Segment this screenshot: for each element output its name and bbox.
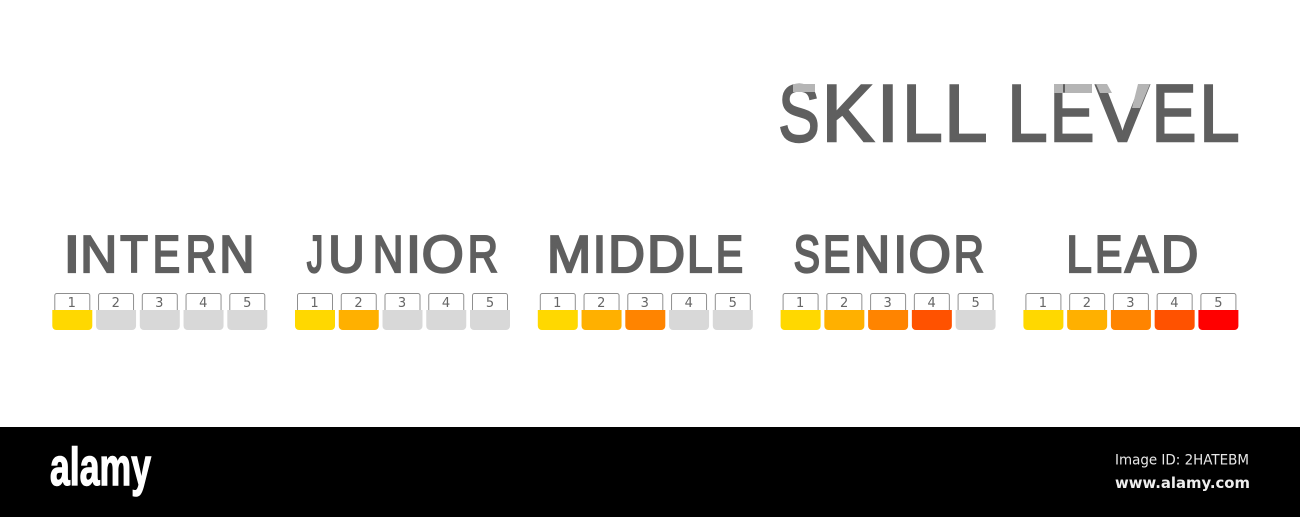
- heading: intern: T: [120, 226, 148, 284]
- heading: lead: E: [1095, 226, 1122, 284]
- heading: intern: R: [186, 226, 216, 284]
- scale: intern: [52, 294, 267, 330]
- scale: senior: 1: [796, 296, 804, 311]
- footer band: [0, 427, 1300, 517]
- scale: intern: 4: [199, 296, 207, 311]
- scale: middle: 3: [641, 296, 649, 311]
- scale: lead: 2: [1083, 296, 1091, 311]
- scale: senior: 3: [883, 296, 892, 311]
- title: E: [1050, 69, 1094, 159]
- title: L: [1199, 69, 1240, 159]
- scale: middle: 5: [729, 296, 737, 311]
- scale: intern: 3: [155, 296, 163, 311]
- website: www.alamy.com: [1115, 474, 1250, 492]
- scale: junior: [295, 294, 510, 330]
- scale: junior: 4: [442, 296, 450, 311]
- heading: middle: D: [608, 226, 645, 284]
- heading: intern: N: [219, 226, 254, 284]
- title: K: [822, 69, 874, 159]
- heading: senior: R: [954, 226, 984, 284]
- heading: lead: L: [1066, 226, 1092, 284]
- scale: junior: 2: [354, 296, 363, 311]
- heading: senior: I: [894, 226, 907, 284]
- scale: junior: 1: [310, 296, 319, 311]
- scale: middle: 1: [553, 296, 561, 311]
- heading: intern: N: [80, 226, 117, 284]
- panel: middle: [538, 226, 753, 330]
- image id: Image ID: 2HATEBM: [1115, 452, 1249, 468]
- heading: junior: O: [422, 226, 464, 284]
- scale: junior: 5: [486, 296, 494, 311]
- heading: middle: D: [647, 226, 685, 284]
- scale: senior: 4: [927, 296, 936, 311]
- heading: senior: S: [794, 226, 820, 284]
- heading: middle: I: [593, 226, 606, 284]
- scale: senior: 5: [971, 296, 980, 311]
- heading: lead: A: [1125, 226, 1158, 284]
- title: L: [902, 69, 943, 159]
- heading: junior: R: [468, 226, 498, 284]
- scale: intern: 5: [243, 296, 251, 311]
- heading: junior: J: [307, 226, 323, 284]
- scale: intern: 2: [112, 296, 120, 311]
- heading: senior: N: [854, 226, 890, 284]
- heading: lead: D: [1161, 226, 1198, 284]
- heading: junior: N: [373, 226, 403, 284]
- heading: middle: L: [687, 226, 713, 284]
- scale: middle: 2: [597, 296, 605, 311]
- heading: intern: E: [153, 226, 180, 284]
- heading: intern: I: [63, 226, 80, 284]
- scale: lead: 5: [1214, 296, 1223, 311]
- logo: alamy: alamy: [50, 438, 151, 497]
- title: E: [1152, 69, 1196, 159]
- scale: intern: 1: [68, 296, 76, 311]
- scale: junior: 3: [398, 296, 406, 311]
- scale: middle: [538, 294, 753, 330]
- heading: junior: I: [406, 226, 421, 284]
- title: S: [778, 69, 820, 159]
- panel: senior: [781, 226, 996, 330]
- heading: senior: O: [908, 226, 951, 284]
- panel: junior: [295, 226, 510, 330]
- scale: lead: [1023, 294, 1238, 330]
- heading: middle: E: [716, 226, 743, 284]
- title: V: [1096, 69, 1149, 159]
- scale: middle: 4: [685, 296, 693, 311]
- panel: lead: [1023, 226, 1238, 330]
- heading: junior: U: [328, 226, 365, 284]
- scale: lead: 3: [1126, 296, 1135, 311]
- panel: intern: [52, 226, 267, 330]
- title: L: [1007, 69, 1048, 159]
- heading: middle: M: [547, 226, 591, 284]
- scale: lead: 4: [1170, 296, 1179, 311]
- title: L: [944, 69, 986, 159]
- heading: senior: E: [823, 226, 850, 284]
- title: I: [877, 69, 899, 159]
- scale: lead: 1: [1039, 296, 1047, 311]
- scale: senior: [781, 294, 996, 330]
- scale: senior: 2: [840, 296, 848, 311]
